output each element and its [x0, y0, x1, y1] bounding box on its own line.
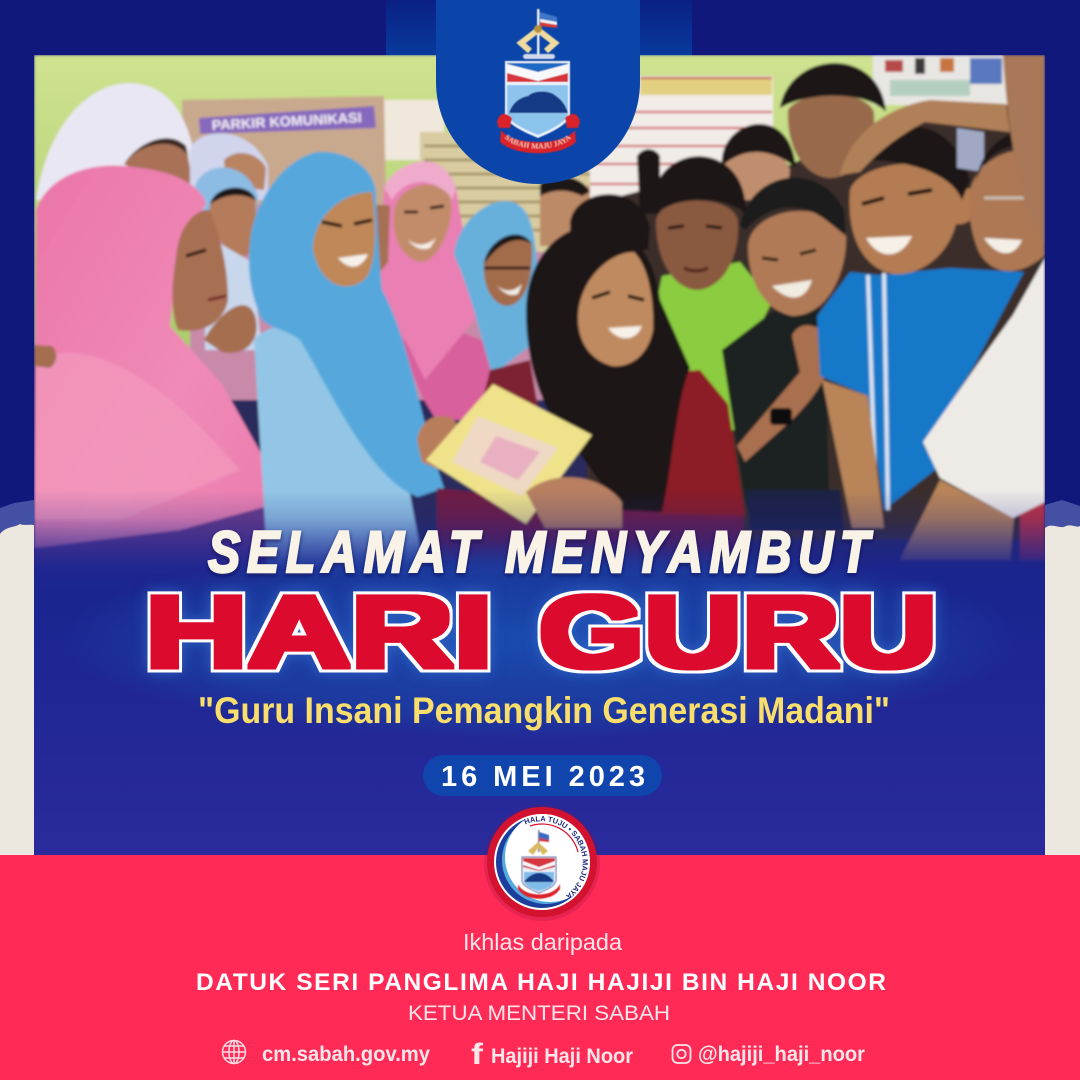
instagram handle: @hajiji_haji_noor [698, 1043, 865, 1066]
activity board [182, 96, 386, 205]
laughing boy in blue shirt [817, 126, 1024, 528]
main title HARI GURU: GURU [539, 575, 937, 689]
sender title: KETUA MENTERI SABAH [408, 1002, 670, 1025]
Sabah crest shield [436, 0, 640, 184]
Hala Tuju round logo: HALA TUJU • SABAH MAJU JAYA [524, 816, 588, 898]
main title HARI GURU: HARI [145, 575, 493, 689]
date pill: 16 MEI 2023 [441, 761, 645, 793]
greeting line: Ikhlas daripada [463, 929, 622, 955]
icon: globe [222, 1040, 246, 1064]
pupil: big pink hijab woman [34, 166, 268, 548]
Hala Tuju round logo [484, 805, 600, 921]
back pupil: white hijab [36, 83, 196, 200]
bottom fade into blue [34, 490, 1045, 600]
top header band [386, 0, 692, 56]
hand on boy's head and far right person [840, 55, 1045, 245]
photo: teacher and pupils [34, 55, 1045, 605]
back boys [540, 63, 886, 250]
torn paper edges [0, 500, 1080, 860]
date pill [423, 755, 662, 796]
icon: instagram [672, 1045, 690, 1063]
emblem: Sabah coat of arms [496, 8, 581, 154]
blue lower panel [34, 599, 1045, 856]
contact row [222, 1038, 865, 1071]
website: cm.sabah.gov.my [262, 1043, 430, 1066]
main title HARI GURU [145, 575, 937, 689]
back pupils: small hijabs [190, 133, 268, 350]
soft glow behind heading [60, 540, 1020, 740]
slogan: "Guru Insani Pemangkin Generasi Madani" [198, 690, 890, 731]
boy in green shirt [648, 156, 772, 430]
classroom wall, chart and posters [34, 55, 1045, 605]
blinds behind pupils [457, 169, 592, 254]
foreground white shirt [900, 258, 1045, 560]
teacher in black hijab and red blouse [437, 226, 746, 575]
sender name: DATUK SERI PANGLIMA HAJI HAJIJI BIN HAJI NOOR [196, 969, 886, 996]
icon: facebook: f [471, 1038, 484, 1071]
navy background [0, 0, 1080, 560]
pupil: blue hijab with glasses [454, 201, 538, 375]
facebook name: Hajiji Haji Noor [491, 1045, 633, 1068]
pupil: pink hijab centre [366, 161, 496, 420]
greeting heading: SELAMAT MENYAMBUT [208, 520, 876, 585]
footer band [0, 855, 1080, 1080]
activity board: PARKIR KOMUNIKASI [211, 109, 362, 133]
emblem: Sabah coat of arms: SABAH MAJU JAYA [504, 134, 572, 150]
boy in black shirt [722, 178, 846, 530]
boy with glasses far right [957, 128, 1045, 271]
drawing held by teacher [417, 384, 622, 528]
pupil: blue hijab smiling girl [249, 152, 444, 575]
